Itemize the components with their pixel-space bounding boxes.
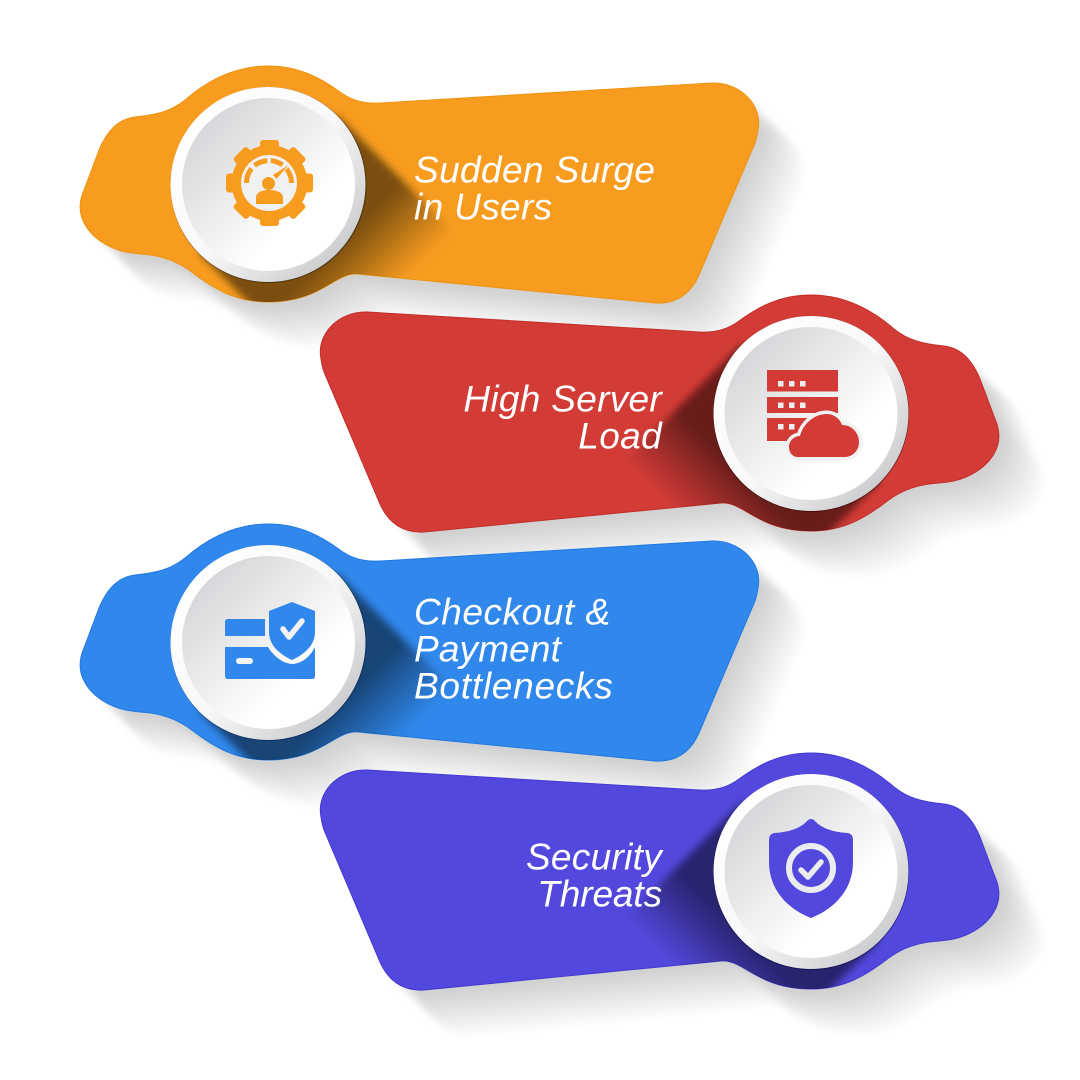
blue banner shape [80, 524, 759, 761]
label: High Server Load: Load [578, 416, 663, 456]
circle long shadow [196, 570, 446, 760]
label: Security Threats: Threats [537, 874, 662, 914]
panel: checkout and payment bottlenecks [80, 524, 798, 800]
label: Security Threats: Security [526, 836, 664, 878]
circle long shadow [632, 799, 883, 989]
icon disc [170, 87, 366, 283]
icon: gear with gauge and user [226, 140, 313, 226]
panel: high server load [320, 294, 1038, 571]
icon disc [713, 316, 909, 512]
red banner shape [320, 295, 999, 532]
circle long shadow [633, 341, 883, 531]
label: Checkout & Payment Bottlenecks: Checkout & [414, 592, 611, 632]
label: Checkout & Payment Bottlenecks: Bottlenecks [414, 666, 614, 706]
circle long shadow [196, 112, 447, 302]
label: Sudden Surge in Users: in Users [414, 186, 552, 228]
purple banner shape [320, 753, 999, 990]
label: High Server Load: High Server [463, 378, 663, 420]
label: Sudden Surge in Users: Sudden Surge [414, 150, 655, 190]
icon: server with cloud [767, 370, 859, 457]
icon disc [170, 545, 366, 741]
panel: security threats [320, 752, 1038, 1030]
icon: shield with check [769, 819, 853, 918]
label: Checkout & Payment Bottlenecks: Payment [414, 628, 563, 670]
icon: card with shield [225, 602, 315, 679]
orange banner shape [80, 66, 759, 303]
panel: sudden surge in users [80, 66, 798, 342]
icon disc [713, 774, 909, 970]
